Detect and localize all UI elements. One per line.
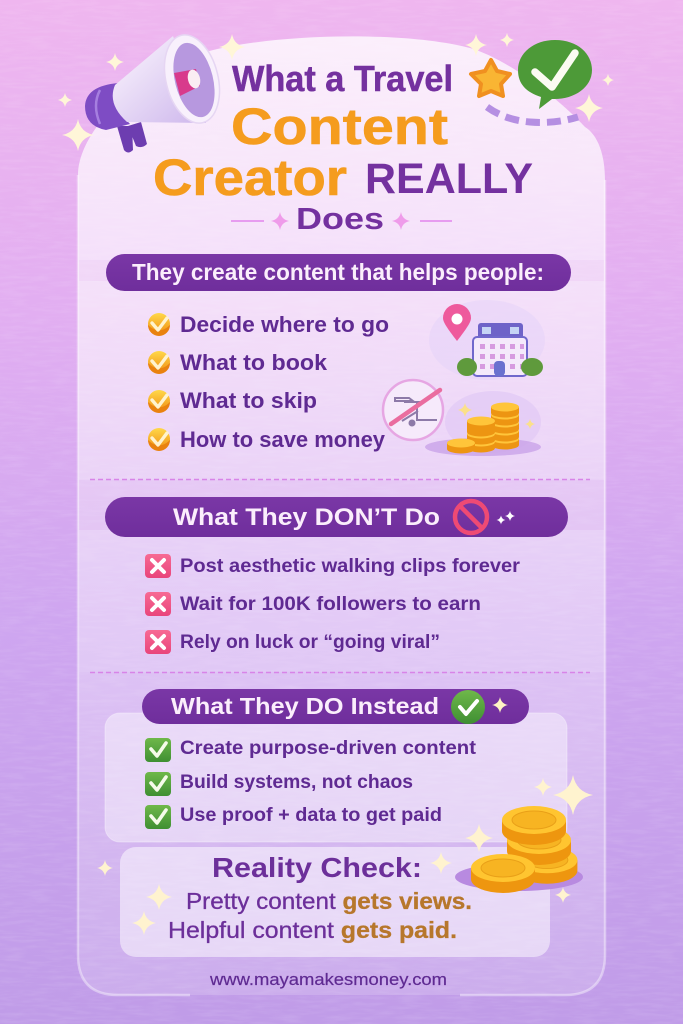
checklist: helps people: What to book	[180, 350, 328, 375]
icon: green check badge	[451, 690, 508, 724]
list: don't do: Wait for 100K followers to earn	[180, 593, 481, 615]
list: do instead: Create purpose-driven content	[180, 738, 477, 759]
heading pill: do instead	[142, 689, 529, 724]
icon: star	[471, 60, 510, 96]
heading pill: don't do: What They DON’T Do	[173, 504, 440, 531]
decorative sparkles: top	[58, 33, 614, 151]
heading pill: helps people: They create content that helps people:	[132, 259, 544, 285]
website footer: www.mayamakesmoney.com	[209, 970, 447, 989]
section 2: what they don't do	[105, 497, 568, 654]
section 1: helps people	[106, 254, 571, 456]
section 3: what they do instead	[105, 689, 567, 842]
checklist: helps people: How to save money	[180, 427, 386, 452]
panel: main card	[78, 36, 605, 995]
reality check line 1: Pretty content gets views.	[186, 888, 472, 914]
checklist: helps people: What to skip	[180, 388, 317, 413]
icon: megaphone	[85, 29, 228, 152]
heading pill: helps people	[106, 254, 571, 291]
title: Content	[231, 98, 448, 155]
heading pill: don't do	[105, 497, 568, 537]
icon: gold coin stacks	[425, 391, 541, 456]
reality check line 2: Helpful content gets paid.	[168, 917, 457, 943]
title: What a Travel	[232, 58, 453, 99]
title ornaments	[231, 212, 452, 230]
title	[153, 58, 533, 236]
list: don't do: Rely on luck or “going viral”	[180, 631, 440, 653]
list: do instead	[145, 738, 477, 829]
icon: prohibited sign	[455, 501, 515, 533]
dashed travel route	[487, 107, 578, 122]
list: don't do: Post aesthetic walking clips forever	[180, 555, 520, 577]
title: Creator	[153, 149, 347, 206]
checklist: helps people: Decide where to go	[180, 312, 389, 337]
title: Does	[296, 201, 384, 236]
icon: large gold coins	[455, 806, 583, 893]
decorative sparkles: bottom	[97, 775, 593, 935]
reality check heading: Reality Check:	[212, 852, 422, 883]
icon: hotel with map pin	[429, 300, 545, 380]
card: do instead	[105, 713, 567, 842]
list: do instead: Use proof + data to get paid	[180, 805, 442, 826]
icon: green speech bubble with check	[518, 40, 592, 109]
title: REALLY	[365, 155, 533, 203]
checklist: helps people	[148, 312, 389, 452]
list: do instead: Build systems, not chaos	[180, 772, 413, 793]
icon: crossed-out skip sign	[383, 380, 443, 440]
heading pill: do instead: What They DO Instead	[171, 693, 439, 719]
list: don't do	[145, 554, 520, 654]
panel: reality check	[120, 847, 550, 957]
